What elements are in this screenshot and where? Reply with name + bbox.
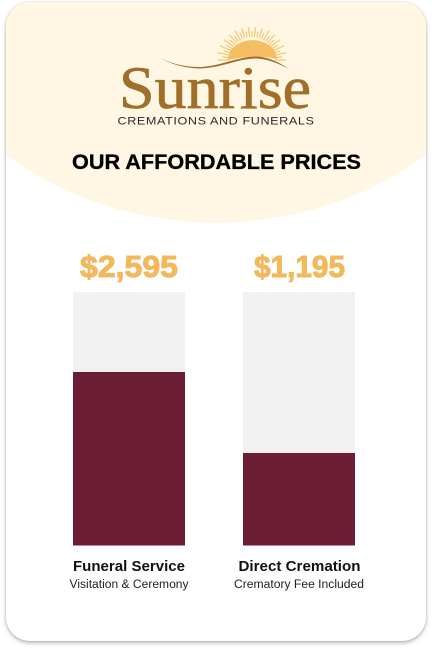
- brand tagline: CREMATIONS AND FUNERALS: [118, 116, 314, 128]
- title: OUR AFFORDABLE PRICES: [72, 151, 361, 174]
- price: funeral service: $2,595: [80, 249, 178, 284]
- bar: funeral service: [73, 292, 185, 546]
- brand name: Sunrise: [119, 55, 311, 121]
- icon: sunrise logo: [160, 27, 289, 69]
- icon: sun rays: [218, 27, 286, 60]
- header cream arc background: [0, 0, 432, 223]
- label: funeral service: Funeral Service: [73, 559, 185, 575]
- label: direct cremation: Direct Cremation: [238, 559, 360, 575]
- bar chart: [73, 249, 355, 546]
- bar: direct cremation: [243, 292, 355, 546]
- sublabel: direct cremation: Crematory Fee Included: [234, 579, 364, 591]
- sublabel: funeral service: Visitation & Ceremony: [70, 579, 189, 591]
- icon: sun disc: [228, 40, 277, 60]
- price: direct cremation: $1,195: [254, 249, 345, 284]
- icon: horizon swoosh: [160, 56, 289, 69]
